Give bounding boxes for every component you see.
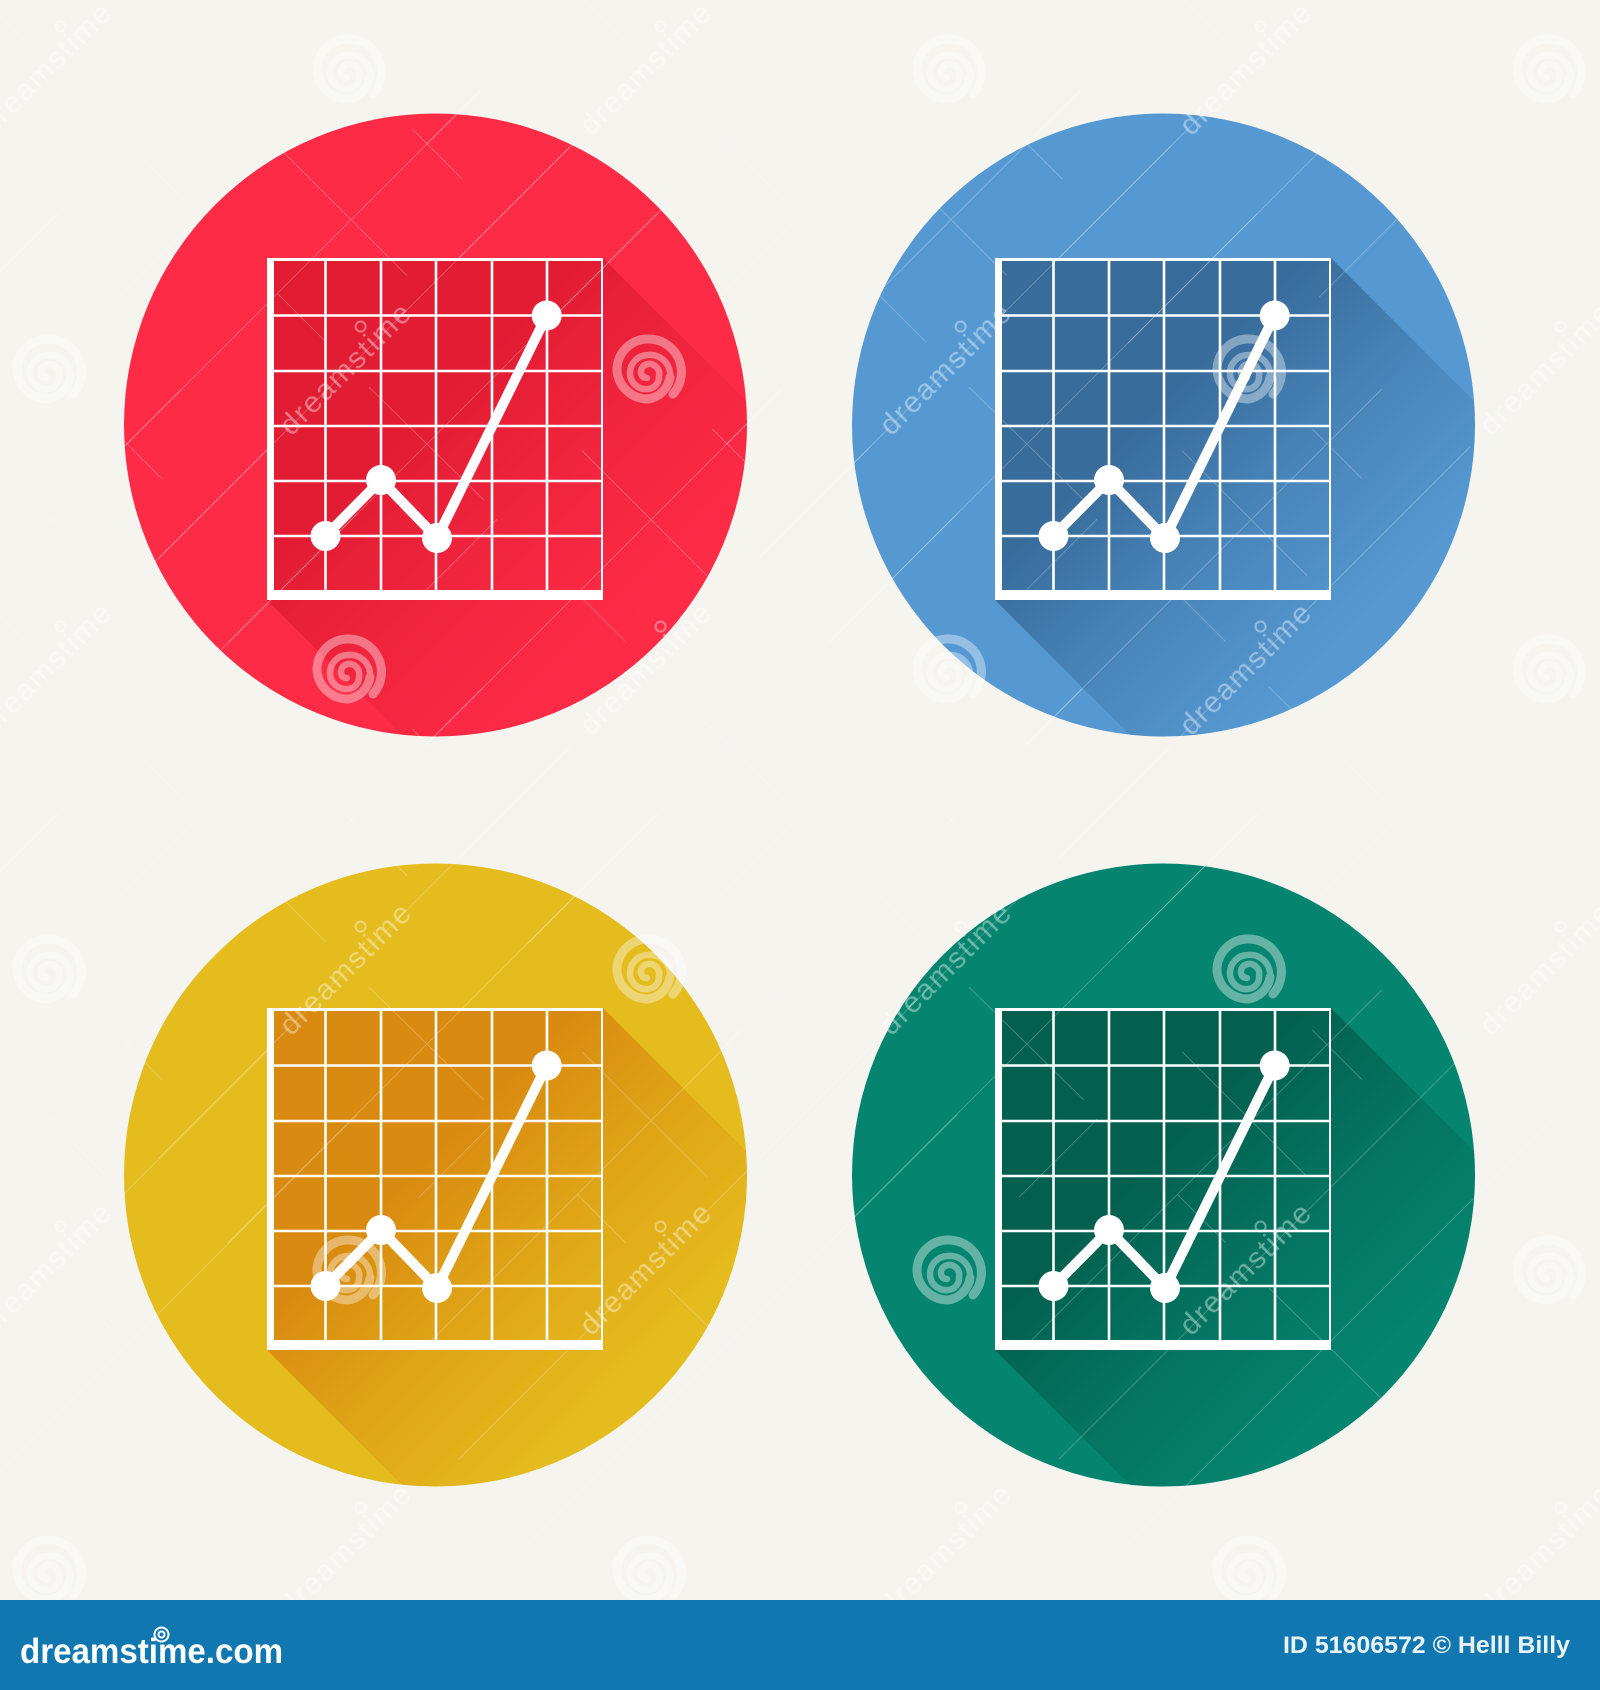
watermark text: dreamstime (573, 0, 718, 142)
footer image ID and credit: ID 51606572 © Helll Billy (1283, 1632, 1571, 1659)
watermark spirals (312, 334, 1286, 1304)
blue long shadow (995, 258, 1475, 736)
green chart grid (995, 1008, 1331, 1350)
panel: red chart icon (124, 114, 747, 736)
blue circle (852, 114, 1475, 736)
watermark text: dreamstime (1173, 1197, 1318, 1342)
watermark text: dreamstime (1173, 597, 1318, 742)
watermark text: dreamstime (873, 1478, 1018, 1623)
watermark text: dreamstime (273, 1478, 418, 1623)
watermark text: dreamstime (273, 297, 418, 442)
watermark text: dreamstime (873, 297, 1018, 442)
yellow chart grid (267, 1008, 603, 1350)
green circle (852, 864, 1475, 1486)
red chart grid (267, 258, 603, 600)
panel: blue chart icon (852, 114, 1475, 736)
yellow circle (124, 864, 747, 1486)
footer logo text: dreamstime.com (20, 1632, 283, 1671)
red long shadow (267, 258, 747, 736)
watermark text: dreamstime (873, 897, 1018, 1042)
icon: logo spiral (154, 1628, 168, 1642)
watermark text: dreamstime (573, 1197, 718, 1342)
yellow chart line with points (310, 1050, 562, 1303)
red chart line with points (310, 300, 562, 553)
watermark text: dreamstime (273, 897, 418, 1042)
panel: yellow chart icon (124, 864, 747, 1486)
green chart line with points (1038, 1050, 1290, 1303)
watermark text: dreamstime (1173, 0, 1318, 142)
watermark text (283, 114, 1310, 1334)
footer banner (0, 1600, 1600, 1690)
blue chart grid (995, 258, 1331, 600)
watermark thin lines (124, 114, 1474, 1486)
blue chart line with points (1038, 300, 1290, 553)
red circle (124, 114, 747, 736)
watermark text: dreamstime (573, 597, 718, 742)
green long shadow (995, 1008, 1475, 1486)
panel: green chart icon (852, 864, 1475, 1486)
yellow long shadow (267, 1008, 747, 1486)
